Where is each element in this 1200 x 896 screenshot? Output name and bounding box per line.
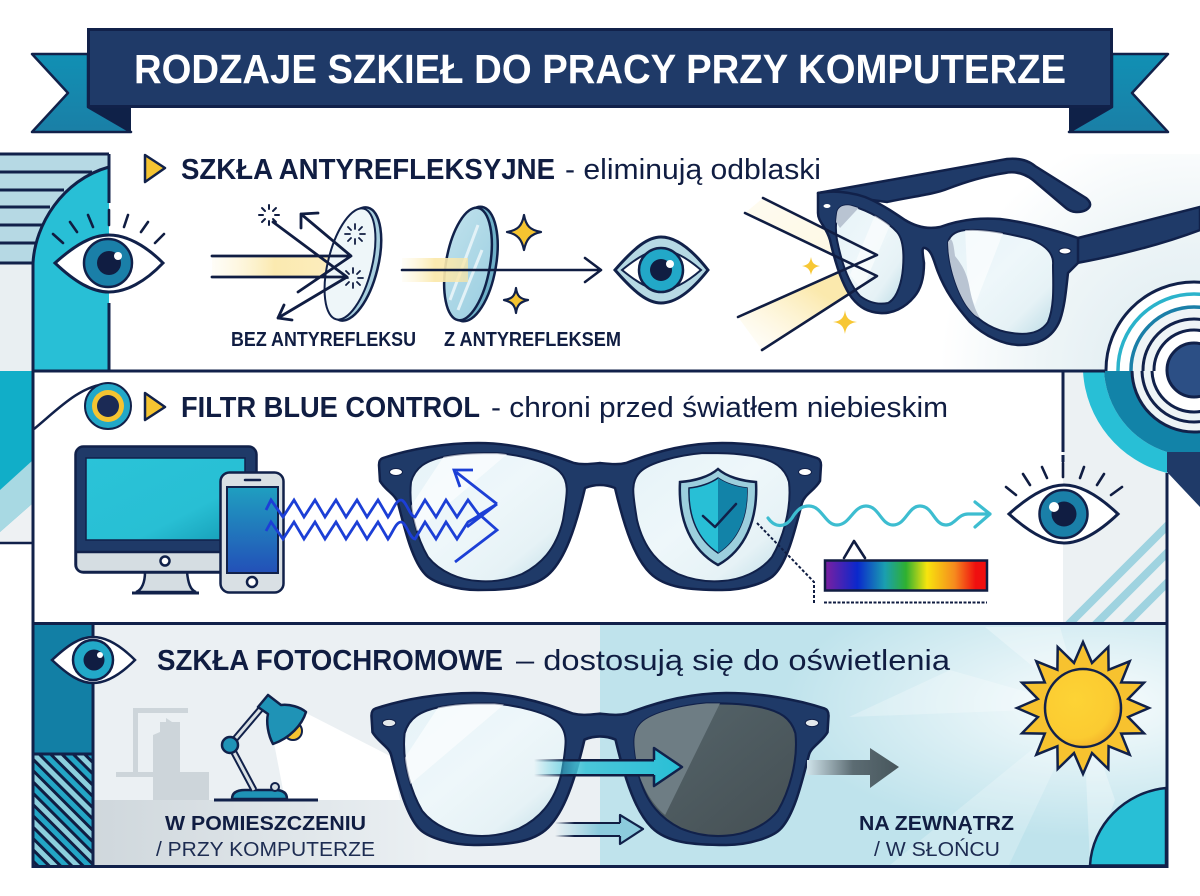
frame: [379, 443, 821, 590]
chart: light spectrum bar: [824, 541, 987, 602]
decoration: teal corner circle: [1090, 788, 1166, 866]
arrow: reflected blue light: [454, 470, 497, 504]
heading: [157, 645, 951, 677]
far temple: [818, 159, 1090, 212]
icon: monitor: [76, 446, 256, 593]
icon: glare burst on lens: [343, 224, 365, 288]
heading regular: – dostosują się do oświetlenia: [516, 645, 951, 677]
label: indoors: [156, 813, 375, 861]
icon: yellow triangle: [145, 155, 165, 182]
sun rays background: [600, 624, 1167, 867]
panel: blue control filter: [0, 371, 1200, 622]
icon: glare burst: [259, 205, 279, 225]
rivets: [382, 719, 819, 727]
right lens: [633, 453, 790, 581]
light cone: [274, 713, 400, 800]
ribbon tail: left: [32, 54, 131, 132]
icon: sparkle: [833, 310, 857, 334]
background: outdoor: [600, 624, 1167, 867]
left lens: [410, 453, 567, 581]
left decoration column: [33, 625, 93, 866]
label bold: NA ZEWNĄTRZ: [859, 813, 1014, 835]
diagram: lens without anti-reflective coating: [212, 202, 391, 326]
icon: yellow triangle: [145, 393, 165, 420]
front frame: [818, 192, 1078, 345]
frame lines: [1063, 372, 1167, 622]
arrow: small under lens: [555, 815, 643, 844]
heading regular: - chroni przed światłem niebieskim: [491, 392, 948, 424]
tinted lens highlight: [634, 703, 720, 815]
arrow: light through lens: [534, 748, 682, 786]
icon: sun: [1017, 642, 1149, 774]
label regular: / W SŁOŃCU: [874, 838, 1000, 861]
icon: protected eye: [615, 237, 708, 303]
panel background glow: [860, 154, 1200, 370]
near temple: [1077, 207, 1200, 263]
left lens reflections: [835, 200, 890, 290]
right lens: [948, 230, 1053, 334]
heading bold: SZKŁA FOTOCHROMOWE: [157, 645, 503, 677]
label: BEZ ANTYREFLEKSU: [231, 329, 416, 351]
diagram: lens with anti-reflective coating: [402, 203, 601, 325]
label: outdoors: [859, 813, 1014, 861]
beam: lower glare: [738, 255, 877, 350]
arrow: dark filtered light: [807, 748, 899, 788]
icon: glasses with shield: [379, 443, 821, 590]
background silhouette: [116, 708, 209, 800]
callout line: [757, 523, 814, 603]
clear lens highlight: [404, 703, 504, 784]
decoration: concentric circles: [1104, 280, 1200, 371]
banner bar: [88, 30, 1112, 106]
right side background: [1063, 372, 1166, 622]
tinted lens: [634, 703, 796, 836]
icon: desk lamp: [214, 695, 318, 800]
decoration: concentric circles lower half: [1083, 371, 1200, 507]
icon: eye with lashes: [1006, 463, 1122, 543]
panel: photochromic lenses: [33, 624, 1167, 867]
icon: glasses in perspective: [738, 159, 1200, 350]
title text: RODZAJE SZKIEŁ DO PRACY PRZY KOMPUTERZE: [134, 46, 1066, 92]
label bold: W POMIESZCZENIU: [165, 813, 366, 835]
heading bold: FILTR BLUE CONTROL: [181, 392, 480, 424]
right lens reflections: [948, 228, 1005, 318]
background: indoor: [93, 624, 600, 867]
icon: shield with check: [680, 469, 756, 565]
icon: target eye with curve: [34, 383, 131, 429]
divider: [92, 625, 94, 866]
beam: upper reflection: [745, 198, 870, 265]
rivets: [824, 204, 1071, 254]
frame: [371, 693, 829, 845]
panel dividers: [33, 263, 1105, 867]
title banner: [32, 30, 1168, 132]
ribbon tail: right: [1069, 54, 1168, 132]
icon: sparkle: [802, 257, 820, 275]
left decoration: stripes and teal arch: [0, 154, 109, 371]
icon: sparkle large: [507, 215, 541, 250]
heading bold: SZKŁA ANTYREFLEKSYJNE: [181, 154, 555, 186]
icon: sparkle small: [504, 288, 528, 313]
floor: [93, 800, 433, 866]
heading regular: - eliminują odblaski: [565, 154, 821, 186]
rivets: [390, 468, 812, 476]
left lens: [836, 205, 903, 304]
panel: antireflective lenses: [0, 152, 1200, 371]
heading: [145, 154, 821, 186]
icon: eye with lashes: [53, 210, 164, 292]
blue light waves and reflection: [266, 470, 497, 562]
left lens highlight: [411, 453, 508, 531]
frame lines: [33, 624, 1167, 866]
clear lens: [404, 703, 566, 836]
rays reflected off the lens: [738, 198, 877, 350]
arrow: filtered light wave: [768, 502, 990, 527]
icon: smartphone: [220, 472, 284, 592]
icon: photochromic glasses: [371, 693, 829, 845]
label: Z ANTYREFLEKSEM: [444, 329, 621, 351]
heading: [145, 392, 948, 424]
icon: teal eye: [52, 637, 135, 683]
left decoration: [0, 371, 33, 543]
label regular: / PRZY KOMPUTERZE: [156, 839, 375, 861]
